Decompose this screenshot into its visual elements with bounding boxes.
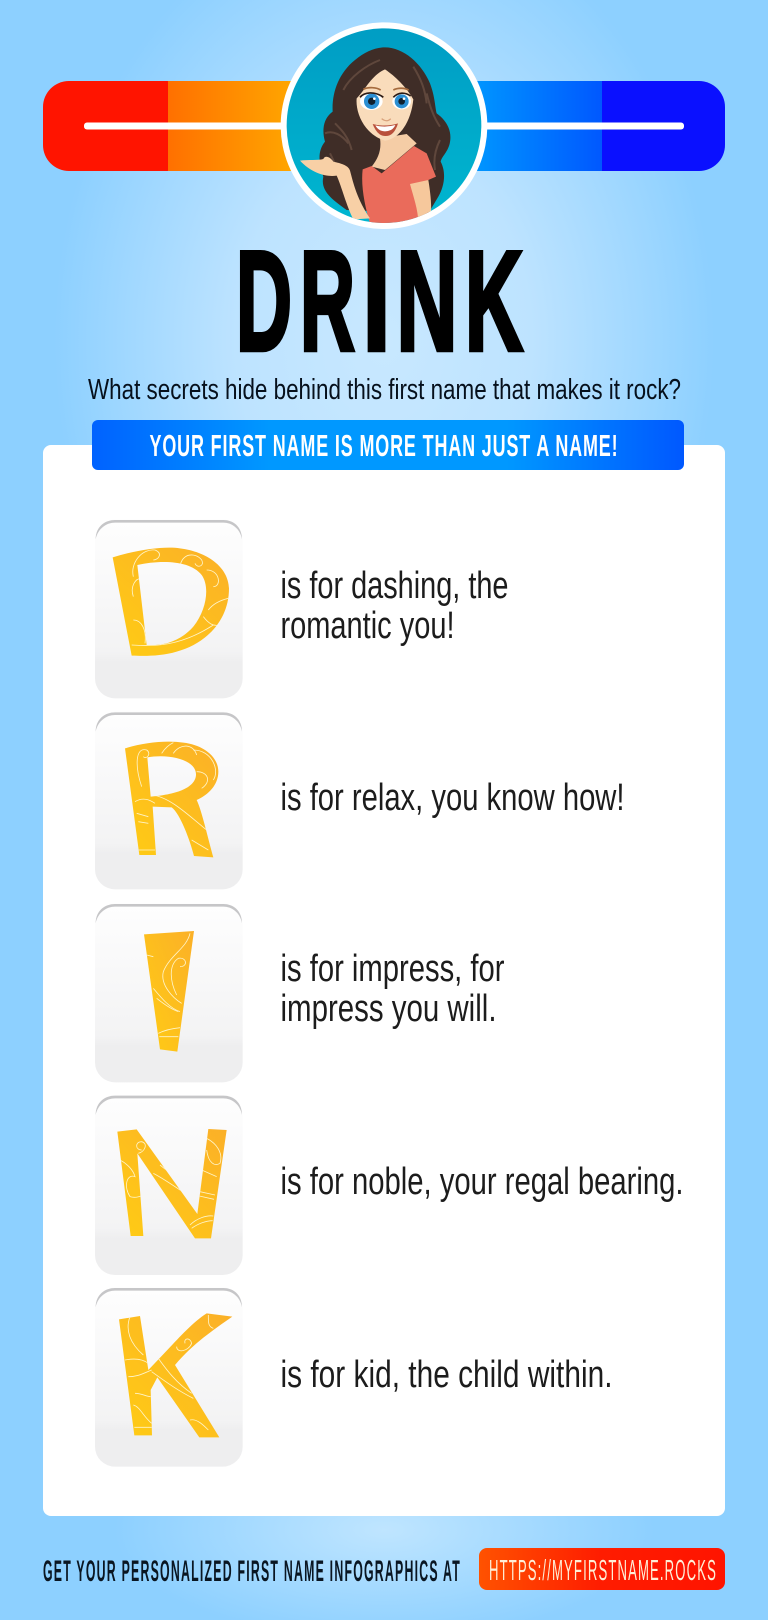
title: K xyxy=(465,222,523,381)
text: D: is for dashing, the xyxy=(280,565,508,607)
card: letter N xyxy=(95,1095,243,1275)
title xyxy=(236,222,523,381)
header ribbon bar xyxy=(43,81,725,171)
white content panel xyxy=(43,445,725,1516)
row 4: N xyxy=(95,1095,683,1275)
title: R xyxy=(300,222,355,381)
text: R: is for relax, you know how! xyxy=(280,777,624,819)
card: letter D xyxy=(95,519,243,698)
row 5: K xyxy=(95,1287,612,1467)
footer url button xyxy=(479,1548,725,1590)
title: N xyxy=(396,222,458,381)
card: letter K xyxy=(95,1287,243,1467)
text: K: is for kid, the child within. xyxy=(280,1354,612,1396)
row 1: D xyxy=(95,519,508,698)
row 1 second line: romantic you! xyxy=(280,605,454,647)
card: letter I xyxy=(95,903,243,1082)
row 3 second line: impress you will. xyxy=(280,988,496,1030)
row 2: R xyxy=(95,712,624,889)
title: D xyxy=(236,222,292,381)
text: I: is for impress, for xyxy=(280,948,505,990)
row 3: I xyxy=(95,903,505,1082)
banner xyxy=(92,420,684,470)
avatar: cartoon woman in circle xyxy=(281,22,487,229)
title: I xyxy=(362,222,390,381)
card: letter R xyxy=(95,712,243,889)
